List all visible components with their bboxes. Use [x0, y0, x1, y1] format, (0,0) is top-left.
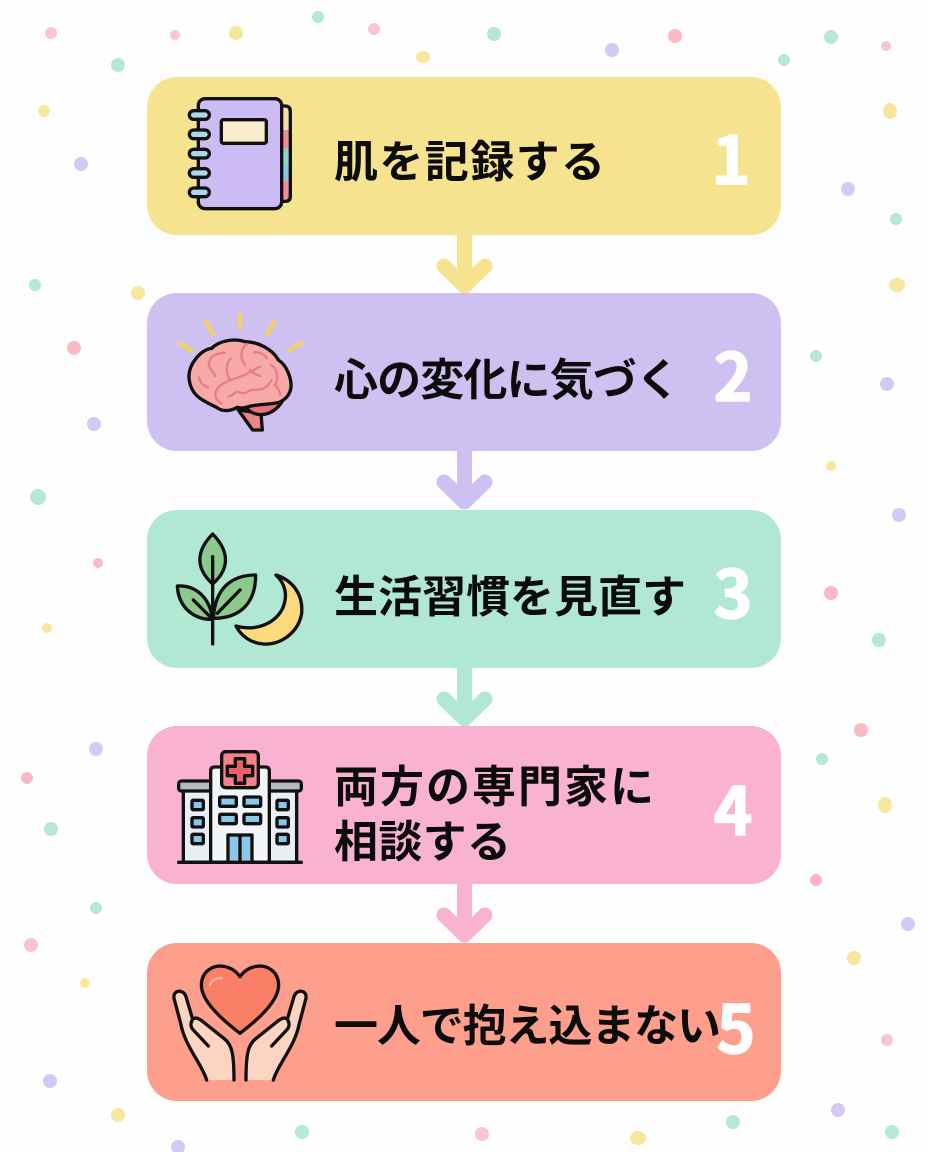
panel: step 4 consult experts: [147, 726, 781, 884]
number 1: 1: [712, 108, 750, 204]
arrow: step 3 to 4: [444, 665, 485, 719]
number 4: 4: [714, 759, 752, 855]
panel: step 5 do not keep it to yourself: [147, 943, 781, 1101]
heading: step 4, two lines: [334, 763, 654, 867]
arrow: step 4 to 5: [444, 881, 485, 935]
icon: notebook: [189, 99, 290, 209]
heading: step 1: 肌を記録する: [334, 138, 605, 187]
heading: step 4, two lines: 相談する: [334, 818, 511, 867]
number 5: 5: [717, 977, 755, 1073]
heading: step 3: 生活習慣を見直す: [334, 573, 686, 622]
arrow: step 2 to 3: [444, 448, 485, 502]
panel: step 1 record skin: [147, 77, 781, 235]
icon: heart in hands: [174, 966, 306, 1080]
number 2: 2: [714, 325, 752, 421]
icon: brain: [180, 315, 301, 430]
icon: leaves and moon: [177, 534, 302, 644]
panel: step 3 review lifestyle: [147, 510, 781, 668]
icon: hospital: [179, 752, 301, 862]
arrow: step 1 to 2: [444, 232, 485, 286]
heading: step 2: 心の変化に気づく: [334, 356, 680, 405]
heading: step 5: 一人で抱え込まない: [334, 1002, 721, 1051]
panel: step 2 notice mind: [147, 293, 781, 451]
heading: step 4, two lines: 両方の専門家に: [334, 763, 654, 812]
number 3: 3: [714, 542, 752, 638]
